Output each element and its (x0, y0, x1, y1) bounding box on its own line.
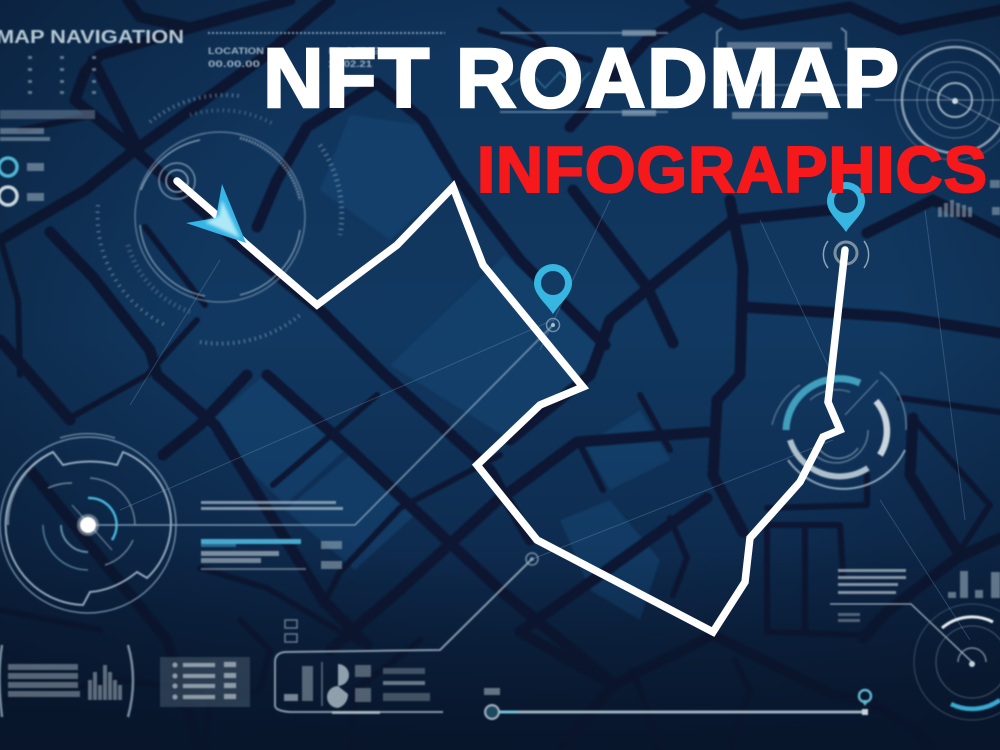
radar: top-left start (98, 95, 342, 344)
HUD header: location readout (208, 30, 668, 116)
route line (177, 181, 845, 632)
HUD readout: top centre-right (510, 28, 870, 119)
icon: location pin centre (534, 264, 572, 332)
HUD header: location readout: LOCATION (208, 46, 264, 56)
radar: bottom-right (914, 571, 1000, 720)
icon: navigation arrow (186, 184, 246, 243)
progress slider (484, 688, 871, 719)
HUD note: lower right (830, 569, 972, 662)
title: NFT ROADMAP (263, 31, 899, 125)
subtitle: INFOGRAPHICS (477, 133, 987, 206)
HUD panel: bottom-left tables (0, 645, 250, 717)
HUD data block: mid-left (201, 501, 343, 570)
HUD label: map navigation: MAP NAVIGATION (0, 27, 184, 47)
bottom shading (0, 540, 1000, 750)
radar: bottom-left (0, 325, 553, 613)
mini bars: top-right (938, 180, 1000, 217)
thin connector lines (120, 200, 970, 640)
HUD panel: bottom-centre chart card (275, 553, 538, 714)
radar: top-right (875, 40, 1000, 160)
HUD header: location readout: DATE (328, 46, 380, 56)
lighter city blocks (205, 115, 670, 620)
HUD header: location readout: 00.00.00 (208, 59, 260, 69)
radar: right junction (772, 372, 906, 489)
icon: location pin right (823, 182, 869, 268)
HUD left side widgets (0, 56, 96, 205)
HUD header: location readout: 19.02.21 (328, 59, 372, 69)
